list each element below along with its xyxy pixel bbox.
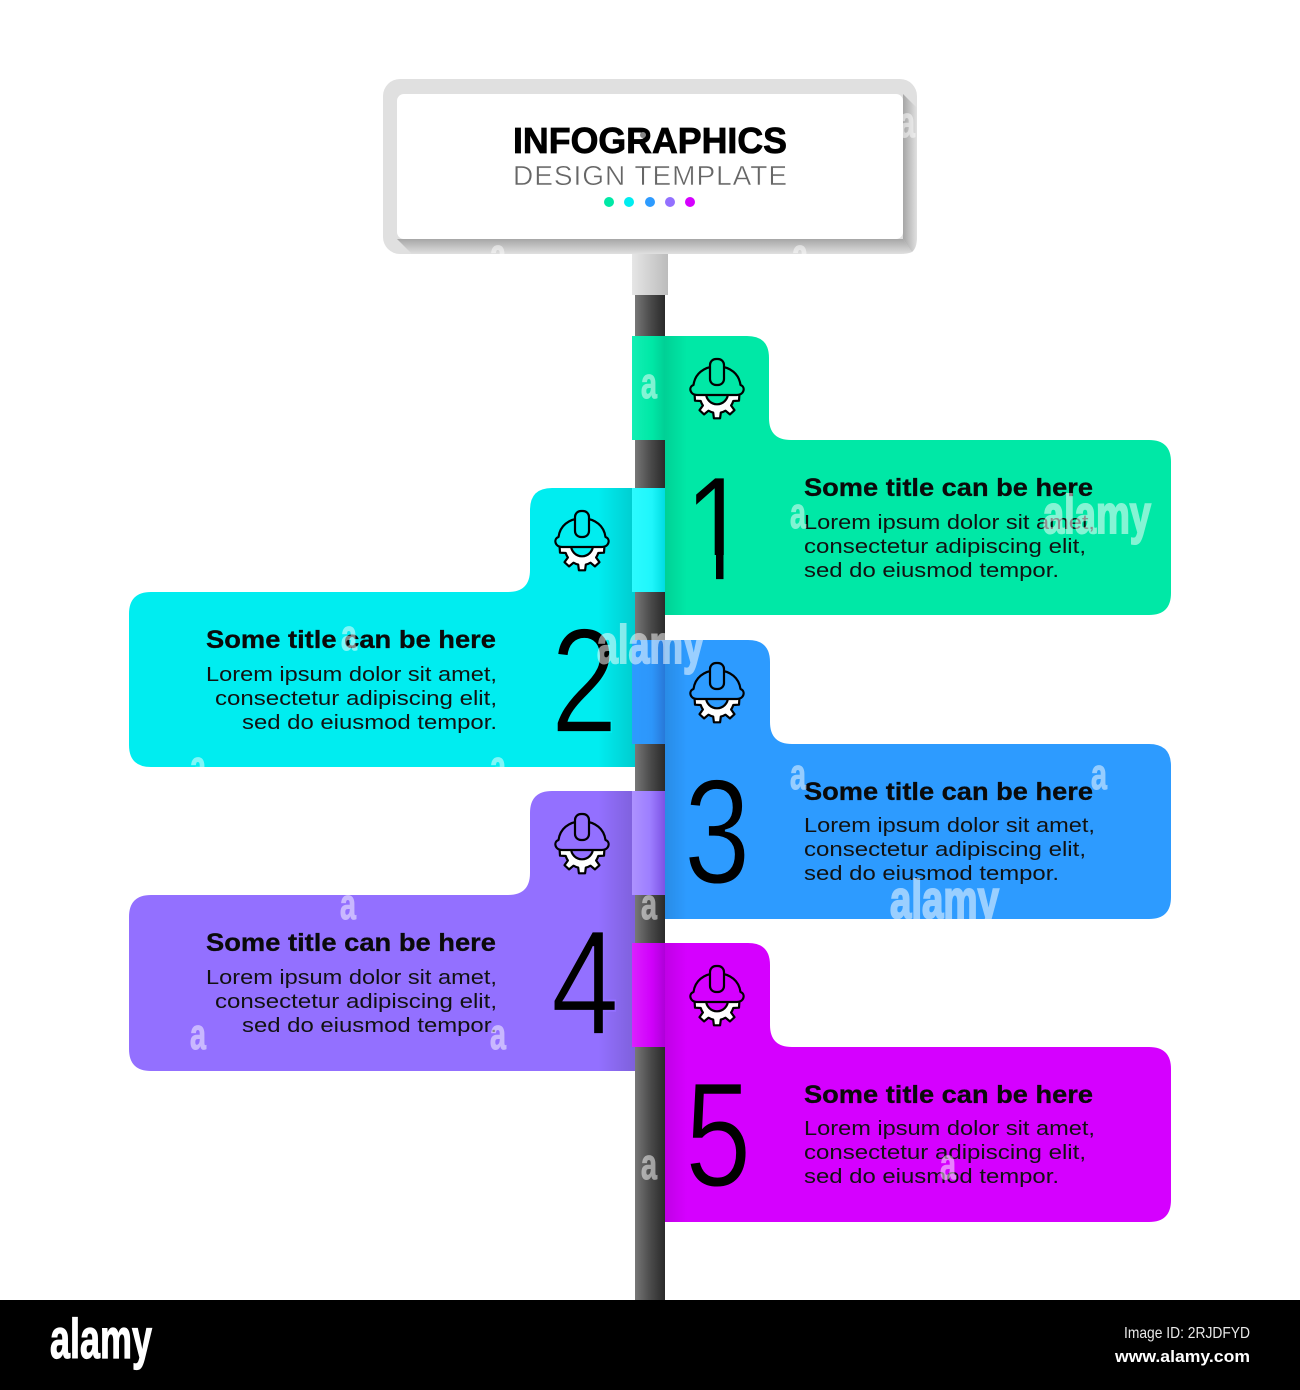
title sign — [383, 79, 917, 254]
website: www.alamy.com — [1114, 1347, 1250, 1366]
heading: INFOGRAPHICS — [513, 120, 787, 161]
icon: helmet and gear — [690, 359, 744, 418]
watermarks — [190, 98, 1151, 1189]
watermarks: a — [1091, 750, 1107, 799]
card text — [804, 814, 1095, 885]
icon: helmet and gear — [690, 663, 744, 722]
number: 2 — [551, 597, 617, 764]
icon: helmet and gear — [555, 814, 609, 873]
number: 1 — [684, 445, 750, 612]
card text: consectetur adipiscing elit, — [804, 838, 1086, 861]
watermarks: a — [340, 880, 356, 929]
watermarks: a — [641, 1140, 657, 1189]
card title: Some title can be here — [804, 778, 1093, 806]
card text: sed do eiusmod tempor. — [242, 1014, 497, 1037]
card text — [804, 511, 1095, 582]
card text: Lorem ipsum dolor sit amet, — [804, 511, 1095, 534]
watermarks: a — [940, 1140, 956, 1189]
number: 4 — [551, 899, 619, 1066]
card title: Some title can be here — [206, 626, 496, 654]
panel: step 5 — [632, 943, 1171, 1222]
card title: Some title can be here — [804, 474, 1093, 502]
icon: helmet and gear — [555, 511, 609, 570]
watermarks: alamy — [597, 615, 704, 675]
watermarks: a — [490, 742, 506, 791]
card text — [206, 663, 497, 734]
card text: sed do eiusmod tempor. — [804, 559, 1059, 582]
watermarks: a — [190, 742, 206, 791]
number: 5 — [685, 1051, 751, 1218]
card text — [206, 966, 497, 1037]
card text — [804, 1117, 1095, 1188]
card text: sed do eiusmod tempor. — [804, 1165, 1059, 1188]
card text: Lorem ipsum dolor sit amet, — [804, 814, 1095, 837]
icon: helmet and gear — [690, 966, 744, 1025]
watermarks: a — [790, 750, 806, 799]
watermarks: alamy — [1043, 485, 1151, 545]
subheading: DESIGN TEMPLATE — [513, 160, 787, 191]
panel: step 4 — [129, 791, 665, 1071]
watermarks: a — [641, 880, 657, 929]
card text: consectetur adipiscing elit, — [215, 990, 497, 1013]
card text: consectetur adipiscing elit, — [804, 535, 1086, 558]
watermarks: a — [899, 98, 915, 147]
card text: consectetur adipiscing elit, — [804, 1141, 1086, 1164]
card text: consectetur adipiscing elit, — [215, 687, 497, 710]
card text: sed do eiusmod tempor. — [242, 711, 497, 734]
watermarks: a — [792, 230, 808, 279]
watermarks: a — [641, 359, 657, 408]
panel: step 2 — [129, 488, 665, 767]
watermarks: alamy — [890, 870, 999, 930]
card title: Some title can be here — [804, 1081, 1093, 1109]
footer logo: alamy — [50, 1307, 152, 1370]
panel: step 3 — [632, 640, 1171, 919]
watermarks: a — [490, 230, 506, 279]
card text: Lorem ipsum dolor sit amet, — [206, 966, 497, 989]
watermarks: a — [341, 611, 357, 660]
panel: step 1 — [632, 336, 1171, 615]
image id: Image ID: 2RJDFYD — [1124, 1325, 1250, 1342]
card text: sed do eiusmod tempor. — [804, 862, 1059, 885]
watermarks: a — [190, 1010, 206, 1059]
watermarks: a — [790, 489, 806, 538]
card text: Lorem ipsum dolor sit amet, — [804, 1117, 1095, 1140]
card title: Some title can be here — [206, 929, 496, 957]
card text: Lorem ipsum dolor sit amet, — [206, 663, 497, 686]
number: 3 — [684, 748, 750, 915]
colour dots — [604, 197, 695, 207]
pole — [632, 254, 668, 1300]
watermarks: a — [490, 1010, 506, 1059]
footer bar — [0, 1300, 1300, 1390]
